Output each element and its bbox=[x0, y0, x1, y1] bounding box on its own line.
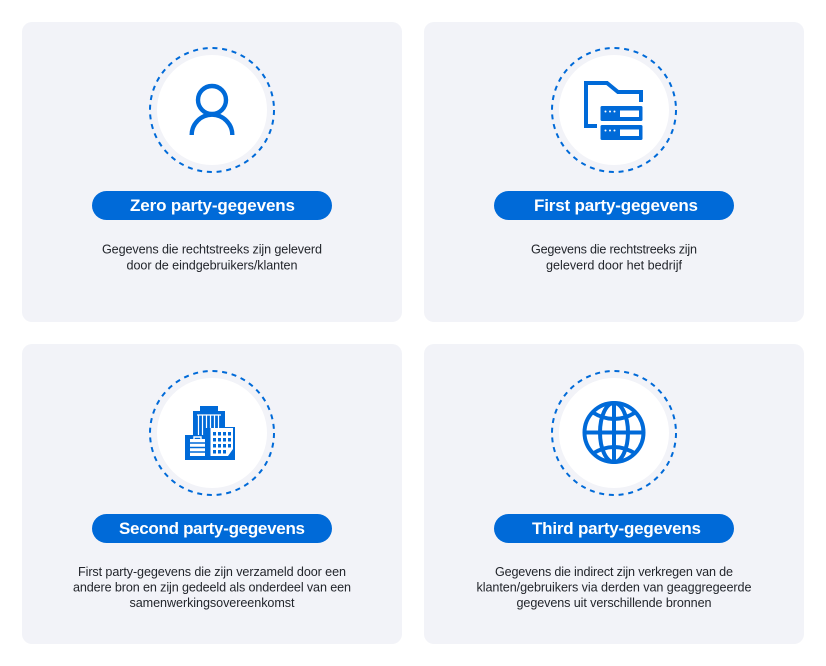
badge: first party icon circle bbox=[552, 48, 676, 172]
heading: zero party: Zero party-gegevens bbox=[130, 196, 295, 215]
text block: second party description: First party-gegevens die zijn verzameld door een bbox=[78, 565, 346, 579]
text block: third party description: Gegevens die indirect zijn verkregen van de bbox=[495, 565, 733, 579]
text block: second party description: andere bron en zijn gedeeld als onderdeel van een bbox=[73, 580, 351, 594]
panel: third party bbox=[424, 344, 804, 644]
heading: second party bbox=[92, 514, 332, 543]
panel: zero party bbox=[22, 22, 402, 322]
text block: second party description bbox=[73, 565, 351, 610]
text block: third party description bbox=[476, 565, 752, 610]
text block: third party description: gegevens uit verschillende bronnen bbox=[516, 596, 712, 610]
badge: third party icon circle bbox=[552, 371, 676, 495]
heading: second party: Second party-gegevens bbox=[119, 519, 305, 538]
panel: second party bbox=[22, 344, 402, 644]
panel: first party bbox=[424, 22, 804, 322]
text block: zero party description: Gegevens die rechtstreeks zijn geleverd bbox=[102, 242, 322, 256]
text block: third party description: klanten/gebruikers via derden van geaggregeerde bbox=[476, 580, 752, 594]
icon: globe bbox=[584, 403, 644, 462]
text block: first party description: Gegevens die rechtstreeks zijn bbox=[531, 242, 697, 256]
icon: folder with servers bbox=[586, 83, 642, 140]
badge: second party icon circle bbox=[150, 371, 274, 495]
text block: zero party description: door de eindgebruikers/klanten bbox=[126, 258, 298, 272]
icon: person bbox=[192, 86, 232, 135]
icon: office buildings bbox=[185, 406, 235, 460]
text block: second party description: samenwerkingsovereenkomst bbox=[130, 596, 295, 610]
badge: zero party icon circle bbox=[150, 48, 274, 172]
heading: first party: First party-gegevens bbox=[534, 196, 698, 215]
text block: first party description bbox=[531, 242, 697, 272]
text block: first party description: geleverd door het bedrijf bbox=[546, 258, 682, 272]
heading: first party bbox=[494, 191, 734, 220]
heading: zero party bbox=[92, 191, 332, 220]
heading: third party: Third party-gegevens bbox=[532, 519, 701, 538]
text block: zero party description bbox=[102, 242, 322, 272]
heading: third party bbox=[494, 514, 734, 543]
